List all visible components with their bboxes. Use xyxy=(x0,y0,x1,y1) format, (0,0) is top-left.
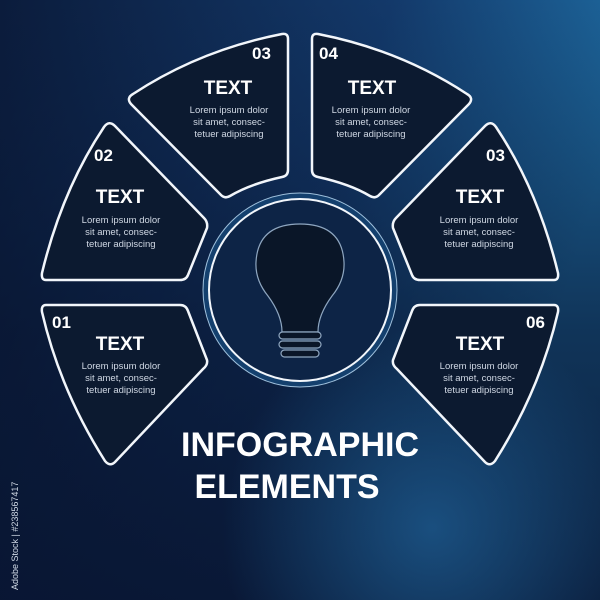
segment 03 top left: sit amet, consec- xyxy=(193,117,265,128)
segment 05 right middle: Lorem ipsum dolor xyxy=(440,215,518,226)
segment 06 right bottom xyxy=(393,305,558,464)
segment 03 top left: TEXT xyxy=(204,78,253,99)
title: INFOGRAPHIC xyxy=(181,426,419,464)
segment 01: Lorem ipsum dolor xyxy=(82,361,160,372)
segment 05 right middle: tetuer adipiscing xyxy=(444,239,514,250)
title xyxy=(181,426,419,506)
segment 02: TEXT xyxy=(96,187,145,208)
segment 02: Lorem ipsum dolor xyxy=(82,215,160,226)
segment 04 top right: 04 xyxy=(319,44,338,63)
segment 02: 02 xyxy=(94,146,113,165)
segment 01: sit amet, consec- xyxy=(85,373,157,384)
segment 01: 01 xyxy=(52,313,71,332)
segment 03 top left: 03 xyxy=(252,44,271,63)
segment 01: tetuer adipiscing xyxy=(86,385,156,396)
segment 04 top right: TEXT xyxy=(348,78,397,99)
segment 02: sit amet, consec- xyxy=(85,227,157,238)
segment 06 right bottom: tetuer adipiscing xyxy=(444,385,514,396)
segment 05 right middle: 03 xyxy=(486,146,505,165)
center circle with bulb icon xyxy=(203,193,397,387)
segment 06 right bottom: sit amet, consec- xyxy=(443,373,515,384)
segment 04 top right: Lorem ipsum dolor xyxy=(332,105,410,116)
segment 04 top right: sit amet, consec- xyxy=(335,117,407,128)
segment 03 top left: tetuer adipiscing xyxy=(194,129,264,140)
segment 02: tetuer adipiscing xyxy=(86,239,156,250)
segment 02 xyxy=(42,123,207,280)
segment 05 right middle: TEXT xyxy=(456,187,505,208)
icon: light bulb xyxy=(256,224,344,357)
segment 03 top left xyxy=(129,34,288,197)
segment 04 top right xyxy=(312,34,471,197)
segment 01: TEXT xyxy=(96,334,145,355)
segment 04 top right: tetuer adipiscing xyxy=(336,129,406,140)
segment 05 right middle: sit amet, consec- xyxy=(443,227,515,238)
segment 06 right bottom: TEXT xyxy=(456,334,505,355)
segment 03 top left: Lorem ipsum dolor xyxy=(190,105,268,116)
side credit text: Adobe Stock | #238567417 xyxy=(10,482,20,590)
segment 06 right bottom: Lorem ipsum dolor xyxy=(440,361,518,372)
segment 06 right bottom: 06 xyxy=(526,313,545,332)
segment 01 xyxy=(42,305,207,464)
segment 05 right middle xyxy=(393,123,558,280)
title: ELEMENTS xyxy=(194,468,380,506)
